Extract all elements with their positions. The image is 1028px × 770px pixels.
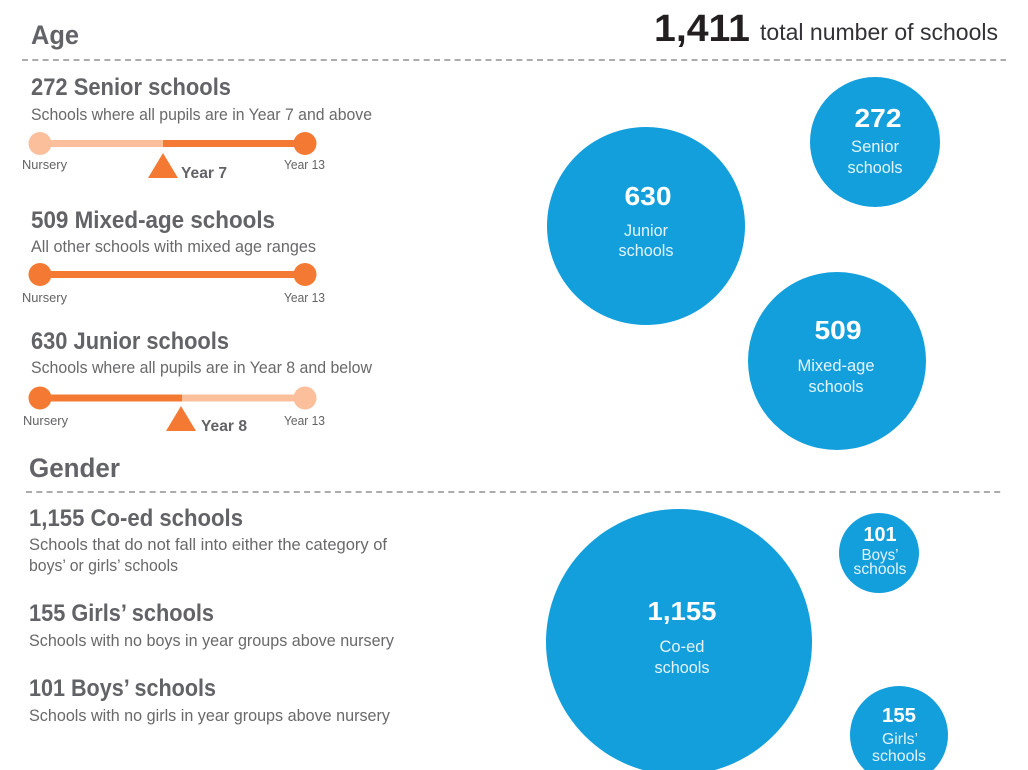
panel: girls' schools [29, 600, 395, 650]
bubble: girls' schools: 155 [882, 705, 916, 727]
junior description: Schools where all pupils are in Year 8 and below [31, 359, 372, 377]
mixed-age range bar: Nursery [22, 290, 67, 305]
mixed-age description: All other schools with mixed age ranges [31, 238, 316, 256]
co-ed description: Schools that do not fall into either the category of [29, 536, 387, 554]
bubble: mixed-age schools: Mixed-age [798, 357, 874, 375]
junior age range bar: Year 13 [284, 413, 325, 428]
senior description: Schools where all pupils are in Year 7 and above [31, 106, 372, 124]
bubble: boys' schools: Boys’ [862, 547, 898, 564]
panel: co-ed schools [29, 505, 387, 575]
bubble: junior schools: schools [618, 242, 674, 260]
girls title: 155 Girls’ schools [29, 600, 214, 627]
bubble: senior schools [810, 77, 940, 207]
senior age range bar: Year 7 [181, 165, 227, 182]
junior age range bar: Nursery [23, 413, 68, 428]
panel: mixed-age schools [22, 207, 325, 305]
boys title: 101 Boys’ schools [29, 675, 216, 702]
bubble: junior schools: 630 [624, 181, 672, 211]
bubble: co-ed schools: 1,155 [648, 596, 716, 626]
co-ed title: 1,155 Co-ed schools [29, 505, 243, 532]
junior age range bar [23, 386, 325, 435]
junior title: 630 Junior schools [31, 328, 229, 355]
bubble: junior schools: Junior [624, 222, 668, 240]
bubble: girls' schools: Girls’ [882, 731, 918, 748]
senior age range bar: Nursery [22, 157, 67, 172]
bubble: boys' schools: schools [854, 561, 906, 578]
bubble: co-ed schools: Co-ed [660, 638, 704, 656]
co-ed description [29, 536, 387, 575]
bubble: senior schools: 272 [854, 103, 902, 133]
bubble: boys' schools: 101 [864, 524, 896, 546]
panel: boys' schools [29, 675, 391, 725]
bubble: junior schools [547, 127, 745, 325]
bubble: girls' schools: schools [872, 748, 926, 765]
total number of schools: total number of schools [760, 19, 998, 45]
heading: Gender: Gender [29, 453, 120, 483]
senior age range bar: Year 13 [284, 157, 325, 172]
panel: junior schools [23, 328, 372, 435]
bubble: senior schools: schools [848, 159, 902, 177]
boys description: Schools with no girls in year groups above nursery [29, 707, 391, 725]
girls description: Schools with no boys in year groups above nursery [29, 632, 395, 650]
bubble: senior schools: Senior [851, 138, 900, 156]
total number of schools: 1,411 [654, 8, 750, 50]
co-ed description: boys’ or girls’ schools [29, 557, 178, 575]
total number of schools [654, 8, 998, 50]
mixed-age range bar: Year 13 [284, 290, 325, 305]
mixed-age range bar [22, 263, 325, 305]
bubble: mixed-age schools: 509 [814, 315, 862, 345]
bubble: boys' schools [839, 513, 919, 593]
bubble: co-ed schools: schools [654, 659, 710, 677]
bubble: co-ed schools [546, 509, 812, 770]
bubble: mixed-age schools [748, 272, 926, 450]
mixed-age title: 509 Mixed-age schools [31, 207, 275, 234]
panel: senior schools [22, 74, 372, 182]
bubble: mixed-age schools: schools [808, 378, 864, 396]
junior age range bar: Year 8 [201, 418, 247, 435]
bubble: girls' schools [850, 686, 948, 770]
senior age range bar [22, 132, 325, 182]
senior title: 272 Senior schools [31, 74, 231, 101]
heading: Age: Age [31, 20, 79, 50]
